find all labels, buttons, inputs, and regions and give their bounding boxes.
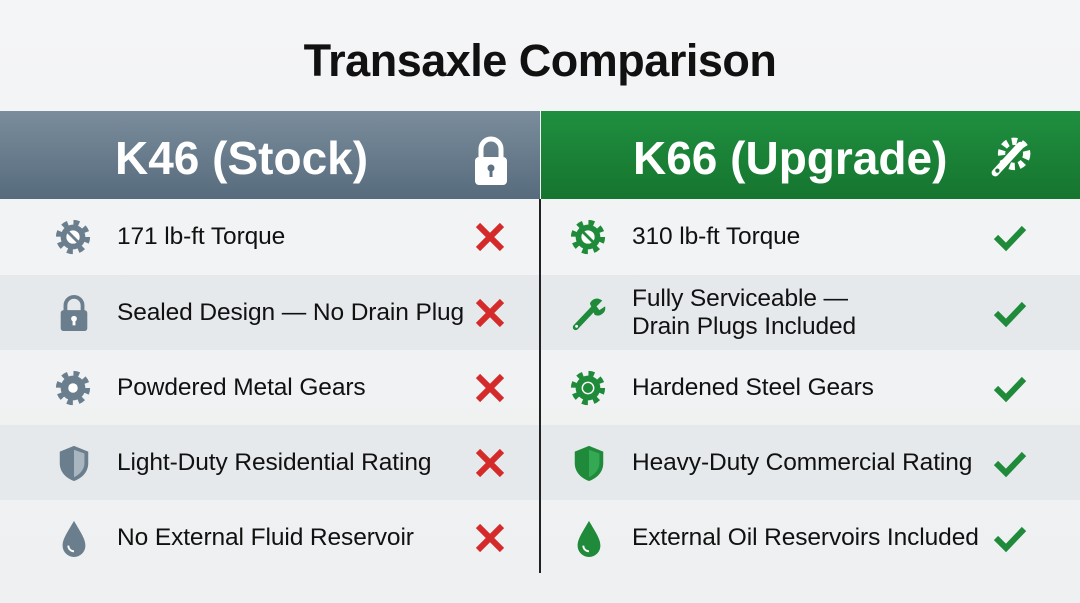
header: K46 stock: K46 (Stock) [115,132,368,184]
row 5: No External Fluid Reservoir [117,524,414,550]
row 2: Sealed Design — No Drain Plug [117,298,464,326]
row 1 [56,220,1026,254]
header: K66 upgrade [541,111,1080,199]
title: Transaxle Comparison [304,35,776,86]
row 3: Powdered Metal Gears [117,374,366,400]
row 5: External Oil Reservoirs Included [632,524,979,550]
row 4: Light-Duty Residential Rating [117,448,431,476]
row 5 [62,521,1026,557]
icon: wrench gear header [992,138,1030,176]
row 3 [56,370,1026,406]
header: K66 upgrade: K66 (Upgrade) [633,132,947,184]
header: K46 stock [0,111,540,199]
row 3: Hardened Steel Gears [632,374,874,400]
row 1: 310 lb-ft Torque [632,222,800,250]
row 2: Fully Serviceable — [632,284,848,312]
row 1: 171 lb-ft Torque [117,222,285,250]
row 2: Drain Plugs Included [632,312,856,340]
row 4 [0,425,1080,500]
row 2 [0,275,1080,350]
row 4: Heavy-Duty Commercial Rating [632,448,972,476]
icon: lock header [475,136,507,185]
